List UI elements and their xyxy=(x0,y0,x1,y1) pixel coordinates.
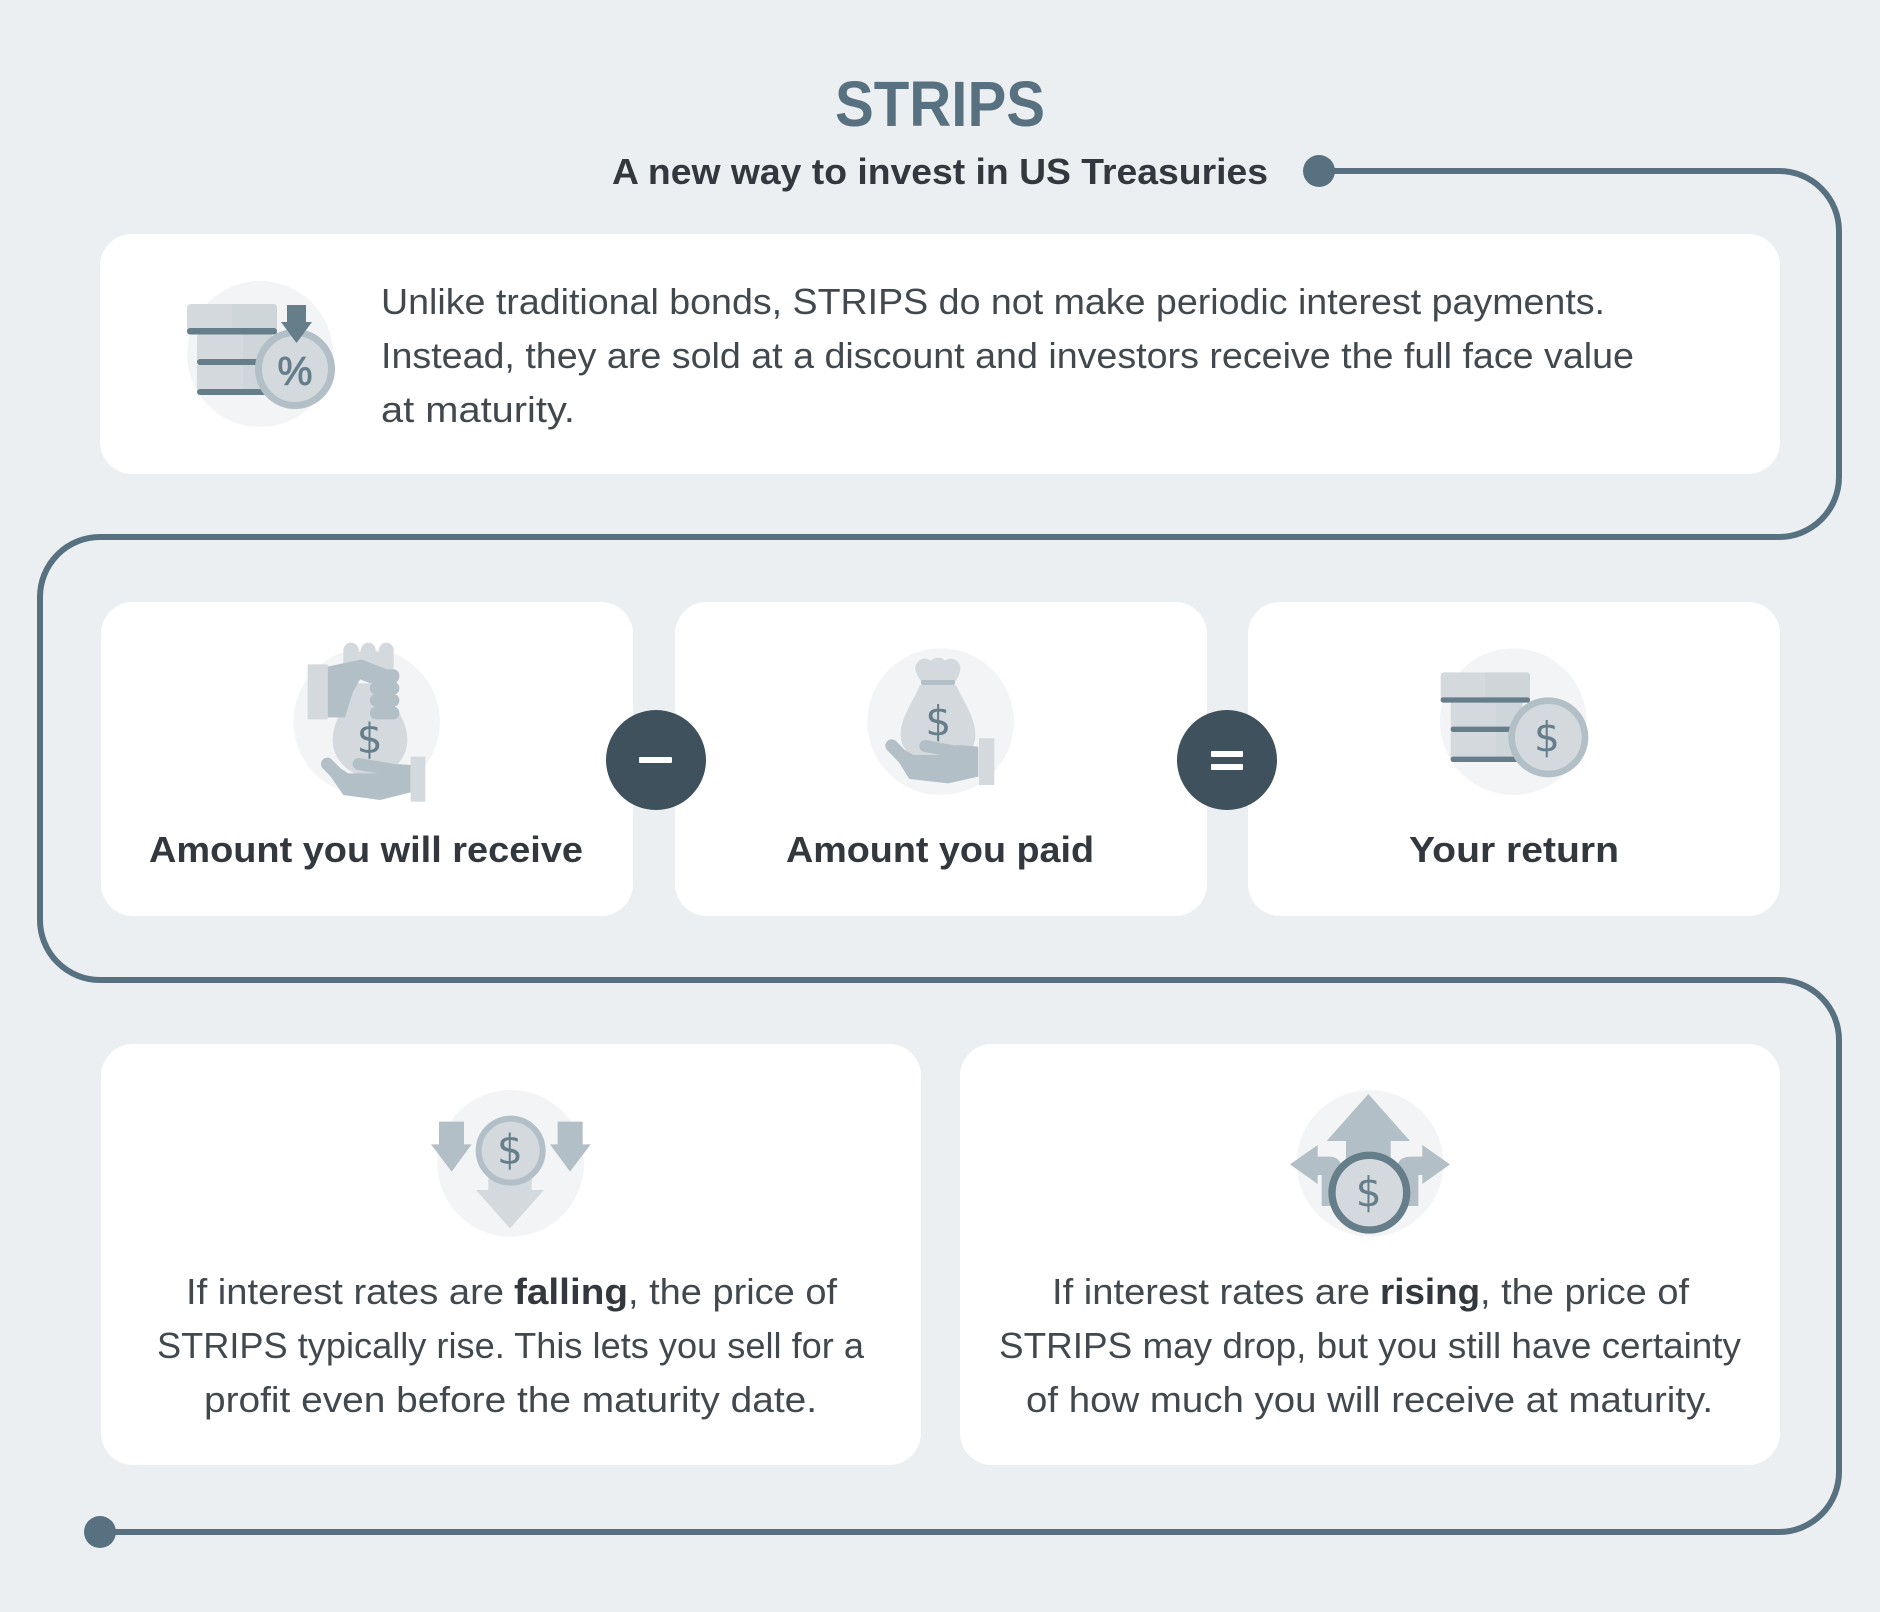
icon: hand passing money bag: $ xyxy=(357,714,383,762)
falling text xyxy=(157,1271,865,1420)
panel: rising rates xyxy=(960,1044,1780,1465)
operator: minus xyxy=(606,710,706,810)
icon: hand holding money bag: $ xyxy=(925,697,951,745)
label: Amount you will receive xyxy=(149,829,583,870)
icon: hand passing money bag xyxy=(293,643,440,802)
falling text: , the price of xyxy=(628,1271,838,1312)
falling text: profit even before the maturity date. xyxy=(204,1379,817,1420)
icon: dollar coin with down arrows: $ xyxy=(497,1125,523,1173)
icon: stacked coins with dollar xyxy=(1440,648,1587,795)
intro text: Unlike traditional bonds, STRIPS do not make periodic interest payments. xyxy=(381,281,1605,322)
intro text: Instead, they are sold at a discount and investors receive the full face value xyxy=(381,335,1634,376)
intro text xyxy=(381,281,1634,430)
rising text: of how much you will receive at maturity. xyxy=(1026,1379,1713,1420)
icon: dollar coin with up arrows: $ xyxy=(1356,1168,1382,1216)
icon: stacked coins with percent: % xyxy=(278,350,312,394)
rising text: , the price of xyxy=(1480,1271,1690,1312)
label: Your return xyxy=(1409,829,1619,870)
intro text: at maturity. xyxy=(381,389,575,430)
subtitle: A new way to invest in US Treasuries xyxy=(612,151,1268,192)
icon: dollar coin with up arrows xyxy=(1290,1090,1450,1237)
falling text: falling xyxy=(514,1271,628,1312)
panel: amount you will receive xyxy=(101,602,633,916)
panel: amount you paid xyxy=(675,602,1207,916)
label: Amount you paid xyxy=(786,829,1094,870)
operator: equals xyxy=(1177,710,1277,810)
rising text: rising xyxy=(1380,1271,1480,1312)
icon: stacked coins with dollar: $ xyxy=(1534,713,1560,761)
icon: dollar coin with down arrows xyxy=(431,1090,591,1237)
rising text: STRIPS may drop, but you still have certainty xyxy=(999,1325,1741,1366)
icon: hand holding money bag xyxy=(867,648,1014,795)
panel: intro xyxy=(100,234,1780,474)
falling text: STRIPS typically rise. This lets you sell for a xyxy=(157,1325,865,1366)
rising text xyxy=(999,1271,1741,1420)
rising text: If interest rates are xyxy=(1052,1271,1370,1312)
panel: falling rates xyxy=(101,1044,921,1465)
title: STRIPS xyxy=(835,68,1045,140)
falling text: If interest rates are xyxy=(186,1271,504,1312)
icon: stacked coins with percent xyxy=(187,281,333,427)
panel: your return xyxy=(1248,602,1780,916)
